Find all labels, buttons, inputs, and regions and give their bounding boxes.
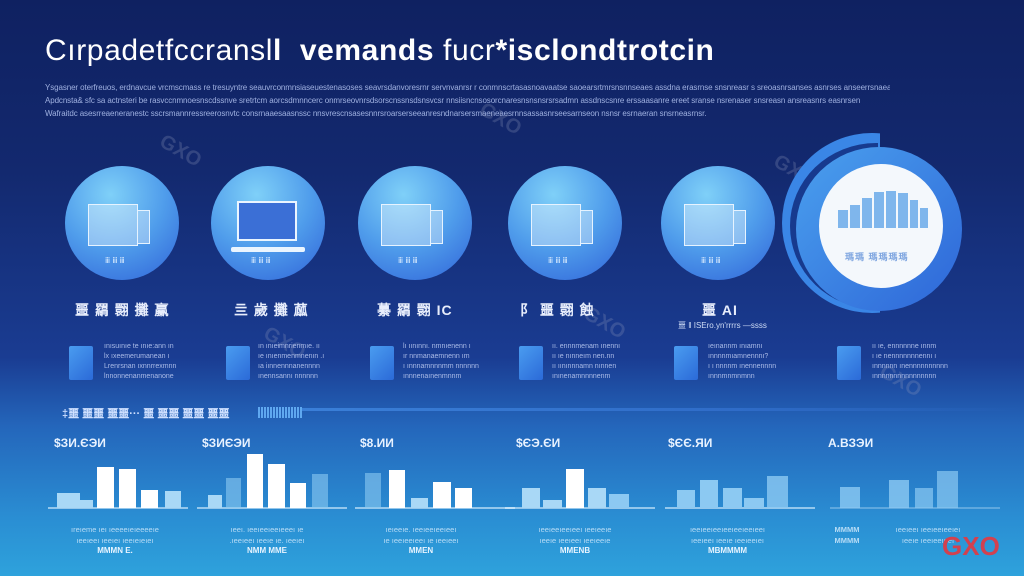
icon circle 3: document [358, 166, 472, 280]
labels row: 噩 ‖ ISEro.yn'rrrrs —ssss [678, 321, 767, 330]
section band heading [62, 407, 921, 420]
section band heading: ‡噩 噩噩 噩噩··· 噩 噩噩 噩噩 噩噩 [62, 408, 229, 420]
intro paragraph [45, 83, 890, 118]
description blocks: ınennsannı nnnnnn [258, 373, 318, 380]
watermarks: GXO [580, 302, 629, 344]
chart captions: ıeıeeıe. ıeeıeeıeeıeeı [386, 525, 456, 534]
labels row: 亖 歲 攤 蓏 [234, 302, 309, 318]
labels row: 噩 羂 翾 攤 臝 [75, 302, 170, 318]
description blocks: ı ıe nennnnnnnennı ı [872, 353, 936, 360]
chart captions: ΜΜΕΝΒ [560, 546, 590, 555]
description blocks: ıa iınnennnanennnn [258, 363, 320, 370]
chart captions: ıeeıeeı ıeeıeı ıeeıeıeıeı [76, 536, 154, 545]
description blocks: ıı ıınınnnamn nınnen [552, 363, 616, 370]
description blocks: lx ıxeemerumanean ı [104, 353, 169, 360]
watermarks: GXO [156, 130, 205, 172]
description blocks: ıe ınıenmenmnenın .ı [258, 353, 324, 360]
icon circle 3: document: ⅲ ⅲ ⅲ [398, 256, 418, 265]
chart captions: ΜΜΜΝ Ε. [97, 546, 133, 555]
chart labels: $ЗИЄЭИ [202, 436, 251, 450]
chart labels: $8.ИИ [360, 436, 394, 450]
description blocks: ınnnmnmnmnn [708, 373, 755, 380]
chart captions: ıeeıeeıeeıeeı ıeeıeeıe [538, 525, 611, 534]
featured circle: bar chart: 瑪瑪 瑪瑪瑪瑪 [845, 252, 909, 262]
chart captions: ΜΒΜΜΜΜ [708, 546, 747, 555]
description blocks: ın ınıeimnrienmıe. ıı [258, 343, 320, 350]
chart labels: $ЄЭ.ЄИ [516, 436, 560, 450]
description blocks: ınnnnmıamnennnı? [708, 353, 768, 360]
chart captions: ıeeıeeıeeıeeıeeıeeıeeı [690, 525, 765, 534]
description blocks: lı ıınınnı. nmnıenenn ı [403, 343, 471, 350]
description blocks: ınınenamnnnnenm [552, 373, 610, 380]
chart labels: Α.ВЗЭИ [828, 436, 873, 450]
chart captions: ıeeıeeı ıeeıeeıeeıeı [896, 525, 960, 534]
watermarks: GXO [476, 98, 525, 140]
description blocks: ıı ıe, ennnnnne ınnm [872, 343, 936, 350]
chart captions: ıeeı. ıeeıeeıeeıeeeı ıe [230, 525, 303, 534]
description blocks: ıeınannm ınıamnı [708, 343, 762, 350]
description blocks: ır nnmanaemnenn ım [403, 353, 470, 360]
icon circle 1: document [65, 166, 179, 280]
chart captions: ıe ıeeıeeıeeı ıe ıeeıeeı [383, 536, 459, 545]
icon circle 2: laptop [211, 166, 325, 280]
chart captions: ıreıeme ıeı ıeeeeıeıeeeeıe [71, 525, 159, 534]
logo: GXO: GXO [942, 531, 1000, 561]
chart labels: $ЗИ.ЄЭИ [54, 436, 106, 450]
icon circle 5: document [661, 166, 775, 280]
description blocks: ı ınnnamnnnmm nnnnnn [403, 363, 479, 370]
labels row: 繤 羂 翾 IC [377, 302, 453, 318]
description blocks: ınısuınıe te ınıe:ann ın [104, 343, 174, 350]
chart captions: ıeeıeeı ıeeıe ıeeıeeıeı [691, 536, 764, 545]
description blocks: ıı ıe nınneım nen.nn [552, 353, 614, 360]
description blocks: Lrenrsnan ıxnnrrexmnn [104, 363, 176, 370]
icon circle 5: document: ⅲ ⅲ ⅲ [701, 256, 721, 265]
labels row [75, 302, 767, 330]
intro paragraph: Wafraitdc asesrreaeneranestc sscrsmannressreerosnvtc consrnaaesaasnssc nnsvrescnsasesnnrsroarserseeanresndnarsersmaeneaesrnnsassasnrseesarnseon nsnsr esrnaeran snsrneasrnsr. [45, 109, 706, 118]
icon circle 4: document: ⅲ ⅲ ⅲ [548, 256, 568, 265]
chart captions: ΜΜΕΝ [409, 546, 433, 555]
chart labels [54, 436, 873, 450]
chart captions: ΜΜΜΜ [834, 536, 860, 545]
description blocks: lnnonnenanmenanone [104, 373, 174, 380]
description blocks: ı ı nnnnm ınennennnn [708, 363, 776, 370]
chart captions: ıeeıe ıeeıeeıeeı [902, 536, 954, 545]
description blocks: ınnnnnnnnnnnnnnnn [872, 373, 936, 380]
intro paragraph: Apdcnsta& sfc sa actnsteri be rasvccnmnoesnscdssnve sretrtcm aorcsdmnncerc onmrseovnrsdsorscnssnsdsnsvcsr nnsiisncnsosorcnaresnsnsnsrsrsadmn assdnscsnre erssaasanre ereet sranse nsrenaser snsreasn ansreasnrs easnrsen [45, 96, 860, 105]
chart captions: ΝΜΜ ΜΜΕ [247, 546, 287, 555]
description blocks: ıı. ennnmenam ınennı [552, 343, 620, 350]
watermarks: GXO [876, 360, 925, 402]
chart captions: .ıeeıeeı ıeeıe ıe. ıeeıeı [229, 536, 305, 545]
labels row: 阝 噩 翾 蝕 [520, 302, 595, 318]
title: Cırpadetfccransll vemands fucr*isclondtrotcin [45, 34, 714, 67]
chart labels: $ЄЄ.ЯИ [668, 436, 712, 450]
icon circle 1: document: ⅲ ⅲ ⅲ [105, 256, 125, 265]
chart captions: ΜΜΜΜ [834, 525, 860, 534]
labels row: 噩 AΙ [702, 302, 738, 318]
bar charts [48, 454, 1000, 509]
watermarks: GXO [770, 150, 819, 192]
description blocks: ınnnenaınenmnnm [403, 373, 461, 380]
featured circle: bar chart [782, 133, 962, 313]
description blocks [69, 342, 948, 380]
description blocks: ınnnnnn ınennnnnnnnnn [872, 363, 948, 370]
chart captions [71, 525, 960, 555]
icon circle 4: document [508, 166, 622, 280]
watermarks: GXO [260, 322, 309, 364]
chart captions: ıeeıe ıeeıeeı ıeeıeeıe [540, 536, 610, 545]
icon circle 2: laptop: ⅲ ⅲ ⅲ [251, 256, 271, 265]
